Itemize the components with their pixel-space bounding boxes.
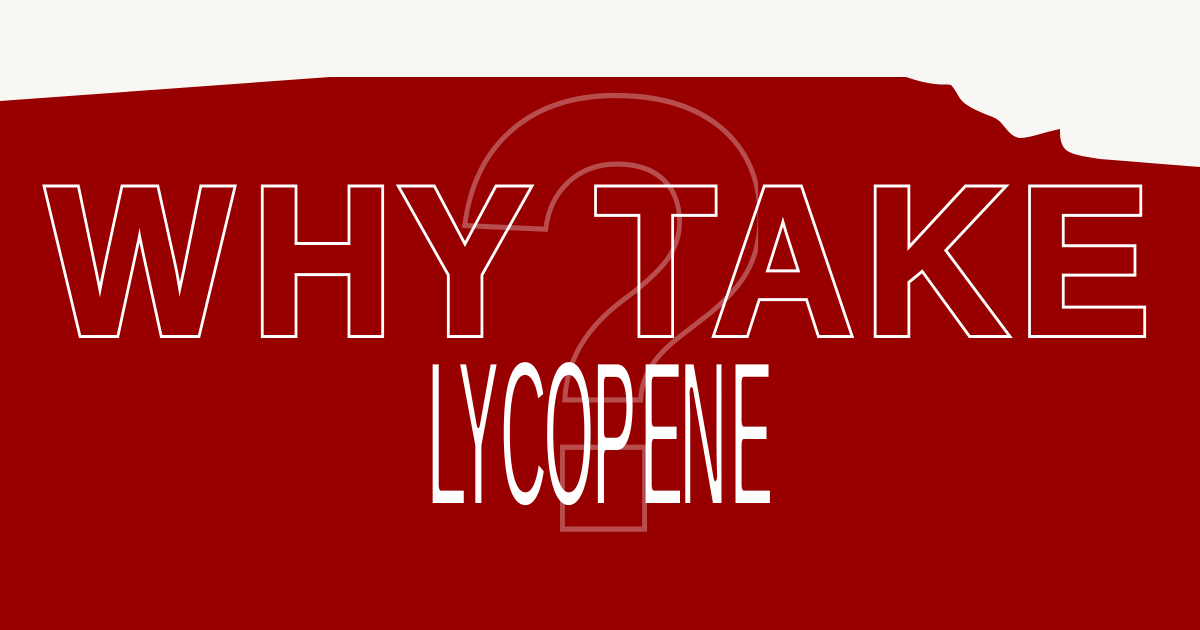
- subtitle: lycopene: LYCOPENE: [426, 312, 774, 556]
- title: why take: WHY TAKE: [47, 143, 1150, 378]
- title: why take: WHY TAKE: [47, 143, 1150, 378]
